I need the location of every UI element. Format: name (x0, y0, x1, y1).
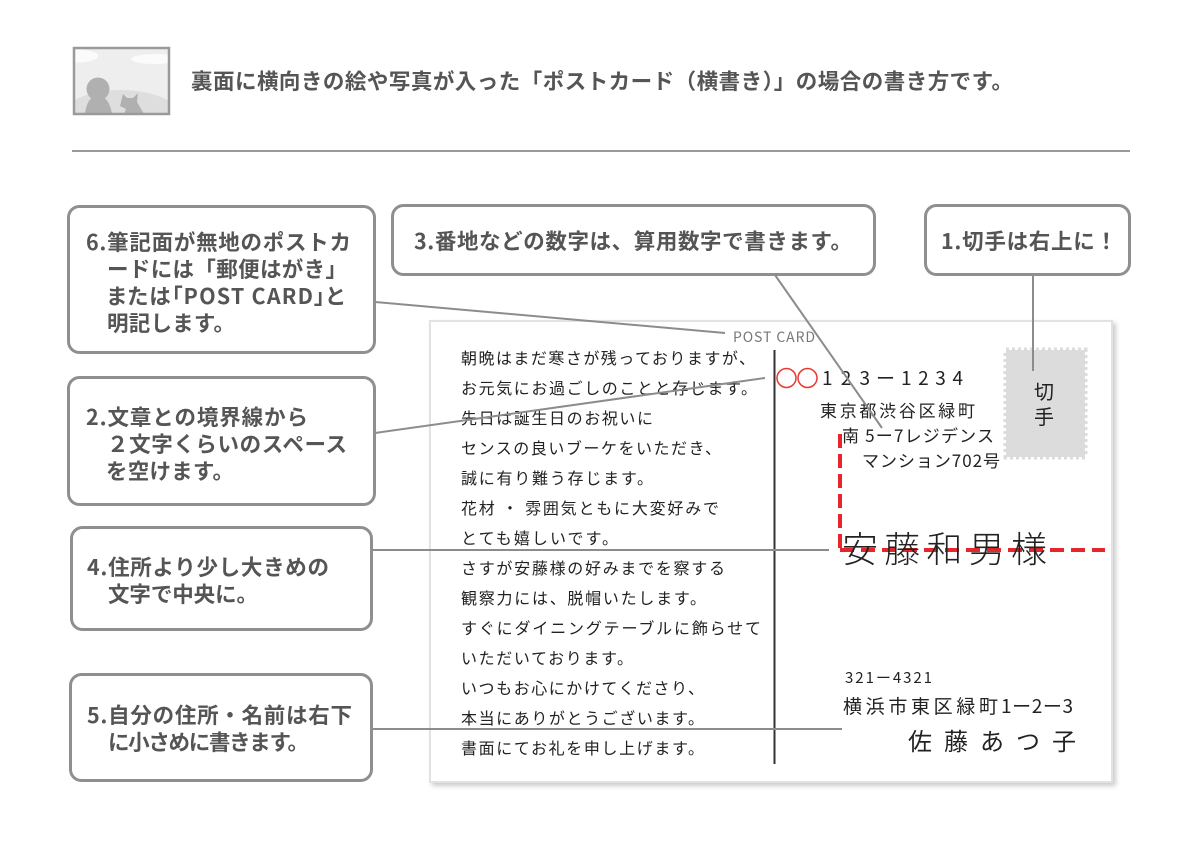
stamp (1006, 350, 1085, 457)
callout 3 (392, 206, 874, 274)
message text: 本当にありがとうございます。 (461, 705, 704, 729)
callout 5 (70, 674, 372, 780)
connector lines (372, 275, 1033, 729)
message text: センスの良いブーケをいただき、 (461, 435, 721, 459)
postal code with red circles (777, 364, 963, 391)
icon: postcard picture thumbnail (72, 46, 170, 116)
callout 2 (68, 378, 374, 504)
recipient address (820, 397, 1000, 472)
callout 4 (72, 528, 372, 630)
postal code with red circles: ー (876, 364, 895, 391)
postal code with red circles: 123 (822, 364, 870, 391)
callout 2: 2.文章との境界線から (86, 401, 308, 432)
panel: postcard (430, 321, 1112, 782)
message text: 書面にてお礼を申し上げます。 (461, 735, 704, 759)
callout 6: 明記します。 (107, 307, 235, 338)
sender details: 横浜市東区緑町 (843, 692, 998, 719)
sender details: 佐藤あつ子 (908, 722, 1076, 757)
recipient name: 安藤和男様 (842, 521, 1047, 573)
red dashed guide lines (840, 434, 1105, 550)
callout 2: ２文字くらいのスペース (107, 428, 347, 459)
callout 4: 文字で中央に。 (108, 578, 258, 609)
callout 1 (926, 206, 1130, 274)
callout 5: に小さめに書きます。 (108, 726, 309, 757)
callout 6: 6.筆記面が無地のポストカ (86, 226, 351, 257)
message text: すぐにダイニングテーブルに飾らせて (461, 615, 761, 639)
callout 6 (68, 206, 374, 352)
message text: とても嬉しいです。 (461, 525, 618, 549)
callout 6: または「POST CARD」と (107, 280, 344, 311)
message text: さすが安藤様の好みまでを察する (461, 555, 725, 579)
recipient address: マンション702号 (862, 447, 1000, 472)
callout 4: 4.住所より少し大きめの (87, 551, 329, 582)
sender details: 321ー4321 (845, 667, 932, 688)
callout 3: 3.番地などの数字は、算用数字で書きます。 (414, 225, 852, 256)
postal code with red circles: 1234 (901, 364, 963, 391)
title: 裏面に横向きの絵や写真が入った「ポストカード（横書き）」の場合の書き方です。 (191, 65, 1013, 96)
message text: お元気にお過ごしのことと存じます。 (461, 375, 757, 399)
message text: 朝晩はまだ寒さが残っておりますが、 (461, 345, 755, 369)
POST CARD label: POST CARD (733, 327, 815, 347)
message text: 観察力には、脱帽いたします。 (461, 585, 706, 609)
stamp: 手 (1034, 401, 1054, 430)
sender details (843, 667, 1076, 757)
sender details: 1ー2ー3 (1001, 692, 1073, 719)
divider between message and address (774, 350, 776, 764)
recipient address: 南 5ー7レジデンス (842, 422, 994, 447)
message text: 誠に有り難う存じます。 (461, 465, 653, 489)
stamp: 切 (1034, 376, 1054, 405)
message text: 先日は誕生日のお祝いに (461, 405, 653, 429)
callout 2: を空けます。 (106, 455, 234, 486)
callout 1: 1.切手は右上に！ (941, 225, 1117, 256)
callout 6: ードには「郵便はがき」 (107, 253, 347, 284)
message text: いつもお心にかけてくださり、 (461, 675, 704, 699)
message text: いただいております。 (461, 645, 633, 669)
message text: 花材 ・ 雰囲気ともに大変好みで (461, 495, 719, 519)
message text (461, 345, 761, 759)
callout 5: 5.自分の住所・名前は右下 (87, 699, 352, 730)
recipient address: 東京都渋谷区緑町 (820, 397, 975, 422)
